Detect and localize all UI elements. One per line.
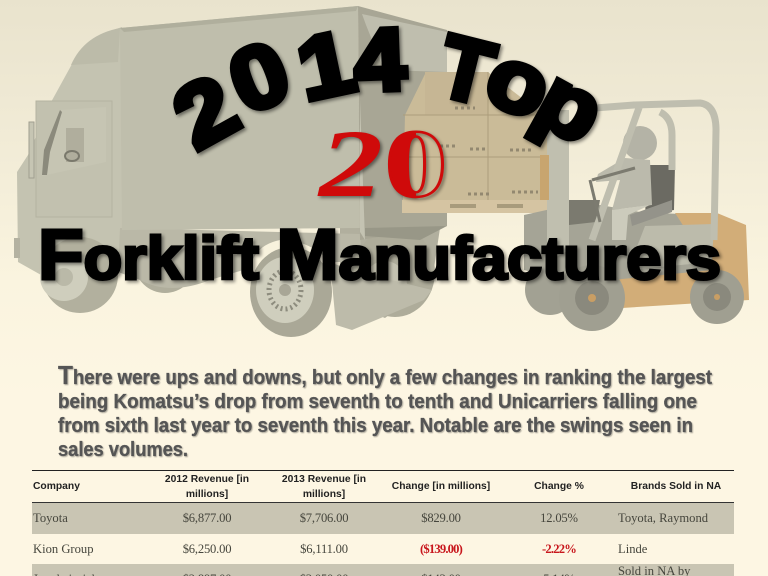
table header row (32, 470, 734, 503)
forklift lower frame (524, 205, 717, 290)
title line: Forklift Manufacturers: Forklift Manufacturers (38, 216, 721, 295)
intro paragraph: There were ups and downs, but only a few changes in ranking the largest (58, 360, 712, 390)
rear wheel (690, 270, 744, 324)
cab window (29, 101, 112, 217)
pallet (402, 200, 549, 213)
title line: 2014 Top on an arc: 2 (157, 55, 253, 168)
truck (14, 6, 447, 337)
title line: 2014 Top on an arc: o (474, 25, 564, 138)
table header row: 2012 Revenue [in (165, 474, 249, 485)
row: Kion Group: $6,111.00 (300, 542, 348, 556)
row: Kion Group: Linde (618, 542, 647, 556)
table header row: Change % (534, 481, 584, 492)
row: Jungheinrich (cut off) (32, 564, 734, 576)
title line: 2014 Top on an arc: 4 (353, 10, 407, 110)
truck chassis (118, 228, 362, 288)
cab roof spoiler (71, 28, 120, 65)
title (38, 10, 724, 295)
row: Toyota (32, 503, 734, 534)
truck box side (120, 6, 360, 230)
mudflap (330, 262, 432, 330)
row: Toyota: Toyota (33, 511, 68, 525)
title number: 20: 2 (317, 111, 383, 217)
row: Kion Group: ($139.00) (420, 542, 462, 556)
table header row: 2013 Revenue [in (282, 474, 366, 485)
table (32, 470, 734, 576)
truck rear wheels (135, 227, 440, 318)
counterweight (612, 213, 749, 308)
title number: 20: 0 (385, 112, 447, 218)
front wheel (40, 237, 118, 313)
front wheel (559, 265, 625, 331)
title line: 2014 Top on an arc (157, 10, 621, 168)
row: Toyota: 12.05% (540, 511, 578, 525)
row: Toyota: $829.00 (421, 511, 461, 525)
middle rear wheel (250, 247, 332, 337)
row: Toyota: Toyota, Raymond (618, 511, 708, 525)
driver (596, 126, 657, 240)
table header row: Company (33, 481, 80, 492)
table header row: millions] (186, 489, 228, 500)
truck box rear opening (358, 6, 447, 240)
table header row: Brands Sold in NA (631, 481, 721, 492)
overhead guard (592, 103, 716, 240)
title line: 2014 Top on an arc: T (430, 16, 503, 124)
row: Kion Group: -2.22% (542, 542, 576, 556)
intro paragraph: from sixth last year to seventh this year. Notable are the swings seen in (58, 415, 693, 437)
table header row: millions] (303, 489, 345, 500)
row: Toyota: $6,877.00 (183, 511, 231, 525)
row: Kion Group: $6,250.00 (183, 542, 231, 556)
intro paragraph: sales volumes. (58, 439, 188, 461)
row: Kion Group (33, 542, 647, 556)
row: Toyota: $7,706.00 (300, 511, 348, 525)
back wheel (525, 265, 575, 315)
steering (590, 168, 635, 222)
forklift (524, 103, 749, 331)
mast (547, 110, 569, 262)
title line: 2014 Top on an arc: p (521, 48, 621, 163)
title line: 2014 Top on an arc: 0 (216, 20, 302, 132)
row: Kion Group: Kion Group (33, 542, 94, 556)
truck cab (17, 27, 124, 280)
intro paragraph: being Komatsu’s drop from seventh to tenth and Unicarriers falling one (58, 391, 697, 413)
title line: 2014 Top on an arc: 1 (289, 11, 363, 119)
table header row: Change [in millions] (392, 481, 490, 492)
seat (645, 165, 675, 215)
front bumper (14, 238, 20, 258)
illustration: truck and forklift (14, 6, 749, 337)
title number: 20 (317, 111, 447, 218)
cardboard boxes on pallet (402, 72, 549, 213)
